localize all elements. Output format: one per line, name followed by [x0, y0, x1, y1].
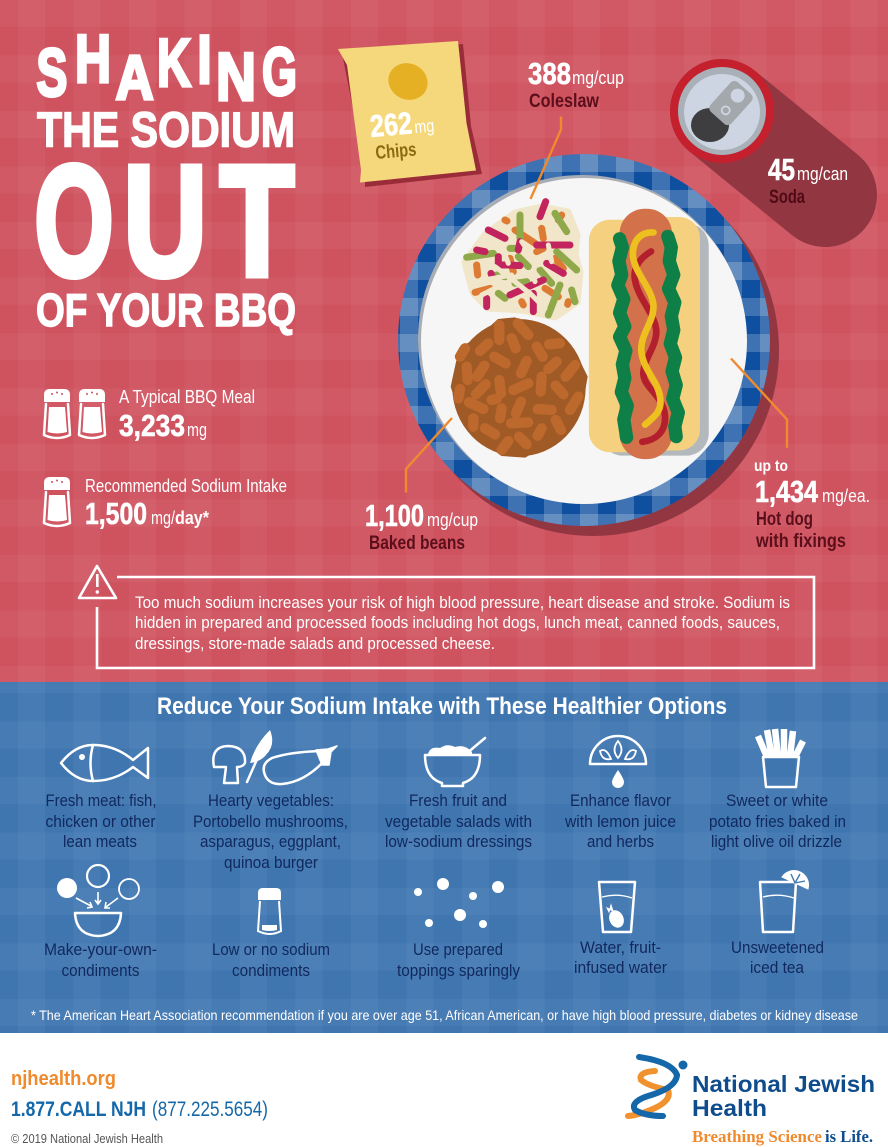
- plate gingham rim: [398, 154, 770, 526]
- icon: bowl: [425, 738, 485, 786]
- panel: blue gingham options: [0, 682, 888, 1033]
- caption: low-sodium dressings: [385, 832, 532, 851]
- option: low sodium condiments: [212, 888, 330, 980]
- copyright: © 2019 National Jewish Health: [11, 1131, 163, 1146]
- caption: lean meats: [63, 832, 137, 851]
- callout: hot dog: [754, 458, 870, 552]
- caption: Unsweetened: [731, 938, 824, 957]
- caption: condiments: [62, 961, 140, 980]
- caption: [193, 791, 348, 872]
- icon: glass with citrus slice: [760, 871, 809, 932]
- ketchup: [635, 251, 665, 442]
- caption: [709, 791, 846, 851]
- icon: lemon and drop: [590, 736, 646, 788]
- caption: chicken or other: [46, 812, 156, 831]
- option: water: [574, 882, 667, 977]
- callout: sodium warning: [79, 566, 814, 668]
- title line: THE SODIUM: THE SODIUM: [37, 104, 295, 158]
- phone: 1.877.CALL NJH: [11, 1098, 146, 1121]
- phone: [11, 1098, 268, 1121]
- title line: SHAKING: G: [262, 34, 297, 110]
- caption: asparagus, eggplant,: [200, 832, 341, 851]
- caption: light olive oil drizzle: [711, 832, 842, 851]
- stat: typical BBQ meal: [44, 387, 255, 443]
- tagline: is Life.: [825, 1127, 873, 1146]
- caption: Portobello mushrooms,: [193, 812, 348, 831]
- caption: iced tea: [750, 958, 804, 977]
- title line: OF YOUR BBQ: OF YOUR BBQ: [36, 284, 296, 336]
- title line: SHAKING: N: [216, 39, 256, 115]
- value: day*: [175, 508, 209, 528]
- option: iced tea: [731, 871, 824, 977]
- can rim: [670, 59, 774, 163]
- icon: helix: [628, 1057, 688, 1116]
- caption: [574, 938, 667, 977]
- option: hearty vegetables: [193, 730, 348, 872]
- caption: quinoa burger: [224, 853, 318, 872]
- caption: condiments: [232, 961, 310, 980]
- leader: coleslaw: [530, 116, 561, 199]
- stat: recommended sodium intake: [44, 476, 287, 531]
- icon: fish: [61, 745, 148, 781]
- option: prepared toppings: [397, 878, 520, 980]
- can shadow: [722, 111, 825, 195]
- icon: mushroom, asparagus, eggplant: [213, 730, 337, 784]
- hot dog: [589, 209, 709, 459]
- leader: baked beans: [406, 418, 452, 492]
- caption: Use prepared: [413, 940, 503, 959]
- plate: [398, 154, 779, 536]
- caption: Hearty vegetables:: [208, 791, 334, 810]
- caption: [44, 940, 157, 980]
- heading: healthier options: Reduce Your Sodium Intake with These Healthier Options: [157, 693, 727, 720]
- icon: fries: [758, 729, 803, 787]
- footer contact details: [11, 1068, 268, 1146]
- panel: red gingham background: [0, 0, 888, 682]
- callout: hot dog: Hot dog: [756, 509, 813, 530]
- callout: baked beans: mg/cup: [427, 510, 478, 530]
- callout: coleslaw: mg/cup: [572, 68, 624, 88]
- soda value: [768, 152, 848, 187]
- caption: Enhance flavor: [570, 791, 671, 810]
- caption: Make-your-own-: [44, 940, 157, 959]
- logo: National Jewish Health: [628, 1057, 875, 1146]
- icon: scattered dots: [414, 878, 504, 928]
- title line: SHAKING: S: [36, 35, 67, 111]
- callout: hot dog: mg/ea.: [822, 486, 870, 506]
- icon: warning triangle: [79, 566, 116, 598]
- value: mg: [187, 420, 207, 440]
- caption: [731, 938, 824, 977]
- caption: [212, 940, 330, 980]
- caption: infused water: [574, 958, 667, 977]
- label: Recommended Sodium Intake: [85, 476, 287, 496]
- leader: hot dog: [731, 358, 787, 448]
- title line: SHAKING: H: [75, 21, 111, 97]
- label: A Typical BBQ Meal: [119, 387, 255, 407]
- value: mg/: [151, 508, 175, 528]
- mustard: [633, 232, 660, 425]
- caption: potato fries baked in: [709, 812, 846, 831]
- phone: (877.225.5654): [152, 1098, 268, 1121]
- sausage: [620, 209, 672, 459]
- icon: salt shakers: [44, 389, 105, 438]
- icon: glass with strawberry: [599, 882, 635, 932]
- caption: [46, 791, 156, 851]
- can lid: [678, 67, 766, 155]
- callout: baked beans: 1,100: [365, 498, 424, 533]
- coleslaw: [465, 202, 580, 317]
- caption: toppings sparingly: [397, 961, 520, 980]
- caption: Water, fruit-: [580, 938, 661, 957]
- panel: footer: [0, 1033, 888, 1147]
- pull tab: [707, 79, 755, 127]
- chips value: mg: [413, 115, 435, 137]
- caption: Fresh meat: fish,: [46, 791, 156, 810]
- callout: baked beans: Baked beans: [369, 533, 465, 554]
- baked beans: [452, 318, 587, 457]
- tagline: Breathing Science: [692, 1127, 822, 1146]
- callout: baked beans: [365, 498, 478, 554]
- can opening: [691, 108, 729, 142]
- option: baked fries: [709, 729, 846, 851]
- title line: OUT: U: [124, 134, 207, 309]
- warning text: Too much sodium increases your risk of high blood pressure, heart disease and stroke. Sodium is: [135, 593, 790, 612]
- option: lemon juice: [564, 736, 676, 851]
- callout: coleslaw: 388: [528, 56, 571, 91]
- callout: hot dog: with fixings: [755, 531, 846, 552]
- title line: OUT: T: [220, 134, 294, 309]
- warning text: [135, 593, 790, 653]
- title line: SHAKING: K: [157, 25, 191, 101]
- bag shadow: [342, 44, 482, 187]
- plate shadow: [407, 164, 779, 536]
- icon: ingredients into bowl: [57, 865, 139, 936]
- callout: coleslaw: [528, 56, 624, 112]
- bun: [589, 220, 655, 452]
- warning box outline: [97, 577, 814, 668]
- plate centre: [421, 178, 747, 504]
- option: fresh salads: [385, 738, 532, 851]
- soda value: 45: [768, 152, 795, 187]
- caption: [385, 791, 532, 851]
- caption: vegetable salads with: [385, 812, 532, 831]
- lettuce: [618, 236, 678, 437]
- title line: SHAKING: A: [116, 44, 154, 113]
- value: [85, 496, 209, 531]
- option: fresh meat: [46, 745, 156, 851]
- website: njhealth.org: [11, 1068, 116, 1090]
- caption: [564, 791, 676, 851]
- bun shadow: [600, 223, 709, 456]
- callout: hot dog: up to: [754, 458, 788, 475]
- wordmark: [692, 1071, 875, 1121]
- chips label: Chips: [375, 139, 417, 164]
- warning text: hidden in prepared and processed foods including hot dogs, lunch meat, canned foods, sauces,: [135, 613, 780, 632]
- title line: SHAKING: [36, 21, 297, 115]
- callout: hot dog: 1,434: [755, 474, 819, 509]
- wordmark: National Jewish: [692, 1071, 875, 1097]
- chips value: 262: [369, 105, 413, 144]
- callout: coleslaw: Coleslaw: [529, 91, 599, 112]
- bag: [338, 41, 476, 182]
- caption: [397, 940, 520, 980]
- value: 3,233: [119, 408, 185, 443]
- caption: and herbs: [587, 832, 654, 851]
- chips bag: [338, 41, 482, 187]
- title: [34, 21, 297, 336]
- wordmark: Health: [692, 1095, 767, 1121]
- title line: OUT: [34, 134, 294, 309]
- caption: Fresh fruit and: [409, 791, 507, 810]
- soda value: mg/can: [797, 164, 848, 184]
- option: make your own condiments: [44, 865, 157, 980]
- soda label: Soda: [769, 187, 805, 208]
- icon: salt shaker: [258, 888, 281, 934]
- title line: SHAKING: I: [197, 21, 212, 98]
- caption: Sweet or white: [726, 791, 828, 810]
- title line: OUT: O: [34, 134, 114, 309]
- caption: Low or no sodium: [212, 940, 330, 959]
- plate inner rim: [418, 175, 746, 503]
- value: 1,500: [85, 496, 147, 531]
- soda can: [670, 59, 848, 208]
- chip: [382, 57, 434, 106]
- warning text: dressings, store-made salads and processed cheese.: [135, 634, 495, 653]
- caption: with lemon juice: [564, 812, 676, 831]
- icon: salt shaker: [44, 477, 70, 526]
